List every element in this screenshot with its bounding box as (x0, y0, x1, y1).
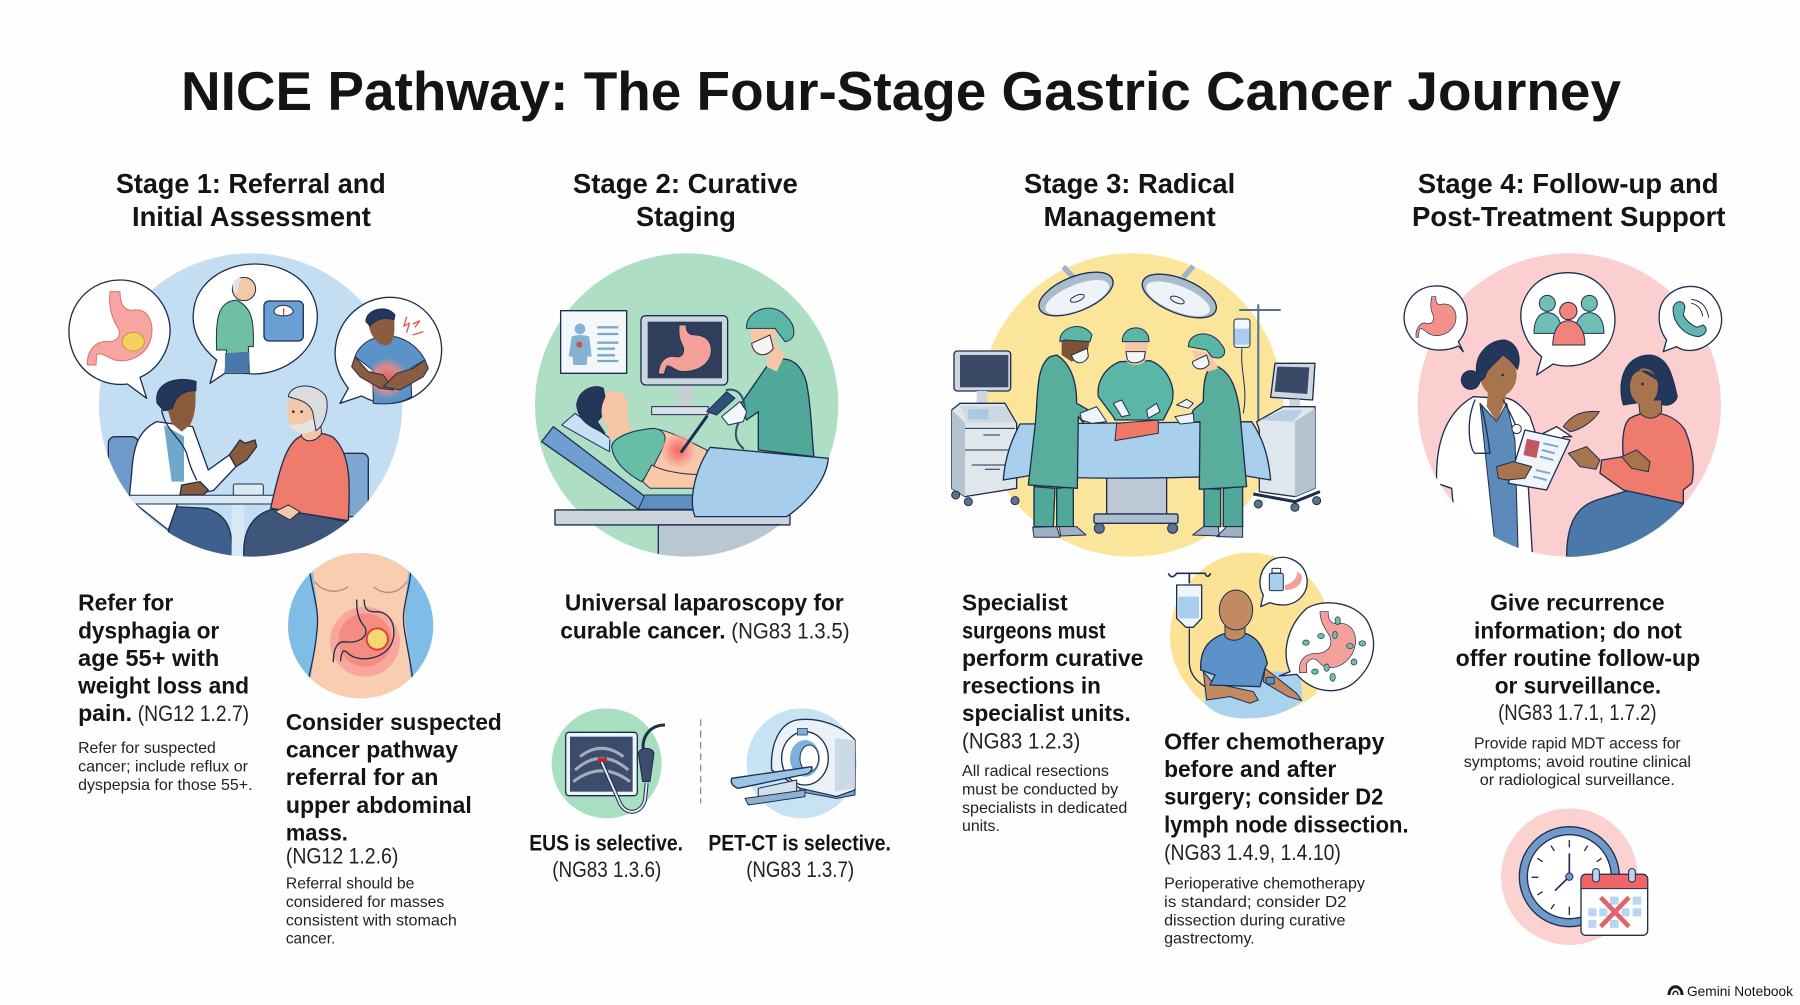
illustration: stage 2 laparoscopy (535, 253, 838, 558)
speech bubble: stomach (1404, 286, 1467, 352)
text: PET-CT selective: (NG83 1.3.7) (746, 857, 854, 882)
text: upper abdominal mass referral: Referral should be (286, 875, 414, 893)
text: recurrence information: or surveillance. (1495, 672, 1661, 698)
text: specialist surgeons: perform curative (962, 645, 1143, 671)
text: specialist surgeons: resections in (962, 672, 1101, 698)
text: dysphagia referral: Refer for suspected (78, 739, 216, 757)
text: upper abdominal mass referral: cancer pathway (286, 737, 458, 763)
text: upper abdominal mass referral: consistent with stomach (286, 911, 457, 929)
heading: stage 4: Post-Treatment Support (1412, 201, 1726, 232)
text: perioperative chemotherapy (1164, 729, 1409, 948)
text: dysphagia referral: pain. (78, 700, 132, 726)
text: upper abdominal mass referral: upper abdominal (286, 792, 472, 818)
text: recurrence information: Give recurrence (1490, 590, 1665, 616)
left surgeon (1028, 327, 1107, 537)
text: specialist surgeons: must be conducted by (962, 780, 1118, 798)
surgeon with laparoscope (682, 308, 814, 457)
heading: stage 1: Initial Assessment (132, 201, 371, 232)
speech bubble: stomach with tumour (69, 280, 170, 398)
text: specialist surgeons (962, 590, 1143, 835)
logo: Gemini Notebook: Gemini Notebook (1687, 983, 1794, 999)
doctor (1437, 340, 1599, 570)
text: specialist surgeons: specialists in dedicated (962, 799, 1127, 817)
text: universal laparoscopy: curable cancer. (560, 617, 726, 643)
text: recurrence information: offer routine follow-up (1456, 645, 1700, 671)
heading: stage 2: Stage 2: Curative (573, 168, 798, 199)
text: dysphagia referral: Refer for (78, 590, 173, 616)
text: perioperative chemotherapy: dissection during curative (1164, 911, 1346, 929)
wall poster (561, 311, 627, 373)
text: perioperative chemotherapy: (NG83 1.4.9, 1.4.10) (1164, 840, 1341, 865)
heading: stage 3: Management (1044, 201, 1216, 232)
illustration: stage 1 consultation (69, 253, 442, 562)
text: perioperative chemotherapy: lymph node dissection. (1164, 811, 1409, 837)
surgical lights (1033, 263, 1222, 327)
text: upper abdominal mass referral (286, 709, 502, 948)
icon: PET-CT scanner (731, 708, 857, 818)
text: dysphagia referral: dyspepsia for those 55+. (78, 776, 253, 794)
divider: dashed line between EUS and PET-CT (699, 719, 703, 803)
stage headings and body text, drawn in 1568-wide coordinates (77, 168, 1726, 948)
text: universal laparoscopy: (NG83 1.3.5) (731, 618, 850, 643)
text: upper abdominal mass referral: Consider suspected (286, 709, 502, 735)
title: NICE Pathway: The Four-Stage Gastric Cancer Journey (181, 60, 1621, 122)
text: perioperative chemotherapy: Offer chemotherapy (1164, 729, 1384, 755)
text: upper abdominal mass referral: referral for an (286, 764, 439, 790)
heading: stage 4: Stage 4: Follow-up and (1418, 168, 1719, 199)
text: upper abdominal mass referral: cancer. (286, 930, 335, 948)
text: dysphagia referral: weight loss and (77, 672, 249, 698)
right surgeon (1175, 334, 1247, 537)
text: perioperative chemotherapy: Perioperative chemotherapy (1164, 875, 1365, 893)
text: upper abdominal mass referral: mass. (286, 819, 348, 845)
speech bubble: abdominal pain (335, 297, 442, 404)
text: dysphagia referral: age 55+ with (78, 645, 219, 671)
text: upper abdominal mass referral: considered for masses (286, 893, 444, 911)
text: perioperative chemotherapy: is standard; consider D2 (1164, 893, 1347, 911)
text: specialist surgeons: surgeons must (962, 617, 1106, 643)
text: recurrence information: Provide rapid MDT access for (1474, 734, 1681, 752)
text: universal laparoscopy: Universal laparoscopy for (565, 590, 844, 616)
heading: stage 3 (1024, 168, 1235, 232)
text: perioperative chemotherapy: before and after (1164, 756, 1336, 782)
speech bubble: weight loss (193, 264, 317, 383)
icon: chemotherapy patient (1168, 553, 1374, 718)
left monitor and cart (952, 351, 1019, 506)
right monitor and cart (1253, 363, 1321, 511)
text: PET-CT selective (708, 831, 891, 882)
speech bubble: MDT team (1521, 273, 1615, 375)
text: recurrence information: information; do not (1474, 617, 1682, 643)
heading: stage 1: Stage 1: Referral and (116, 168, 386, 199)
illustration: stage 4 consultation (1404, 253, 1722, 570)
text: PET-CT selective: PET-CT is selective. (708, 831, 891, 856)
text: recurrence information: or radiological surveillance. (1480, 771, 1675, 789)
text: specialist surgeons: All radical resections (962, 762, 1109, 780)
text: specialist surgeons: units. (962, 817, 1000, 835)
text: EUS selective (529, 831, 683, 882)
centre surgeon (1098, 328, 1173, 420)
text: dysphagia referral (77, 590, 253, 794)
speech bubble: phone call (1659, 286, 1722, 352)
icon: abdomen with mass (288, 547, 433, 700)
icon: endoscopic ultrasound (552, 708, 665, 818)
operating table (1003, 420, 1271, 533)
text: EUS selective: (NG83 1.3.6) (552, 857, 661, 882)
text: dysphagia referral: dysphagia or (78, 617, 219, 643)
text: EUS selective: EUS is selective. (529, 831, 683, 856)
heading: stage 2 (573, 168, 798, 232)
heading: stage 2: Staging (636, 201, 736, 232)
bed and patient (542, 387, 828, 558)
monitor with stomach (641, 316, 728, 415)
text: specialist surgeons: specialist units. (962, 700, 1131, 726)
heading: stage 4 (1412, 168, 1726, 232)
IV stand (1234, 305, 1280, 420)
patient (1567, 355, 1693, 557)
text: specialist surgeons: (NG83 1.2.3) (962, 728, 1080, 753)
text: dysphagia referral: (NG12 1.2.7) (138, 701, 249, 726)
icon: clock and calendar (1501, 808, 1648, 945)
heading: stage 1 (116, 168, 386, 232)
heading: stage 3: Stage 3: Radical (1024, 168, 1235, 199)
text: universal laparoscopy (560, 590, 850, 643)
illustration: stage 3 surgery (952, 253, 1321, 557)
text: recurrence information (1456, 590, 1700, 789)
text: perioperative chemotherapy: surgery; consider D2 (1164, 784, 1383, 810)
text: perioperative chemotherapy: gastrectomy. (1164, 930, 1255, 948)
text: upper abdominal mass referral: (NG12 1.2.6) (286, 843, 398, 868)
text: recurrence information: (NG83 1.7.1, 1.7.2) (1498, 700, 1657, 725)
text: recurrence information: symptoms; avoid routine clinical (1464, 753, 1691, 771)
text: dysphagia referral: cancer; include reflux or (78, 757, 249, 775)
text: specialist surgeons: Specialist (962, 590, 1068, 616)
